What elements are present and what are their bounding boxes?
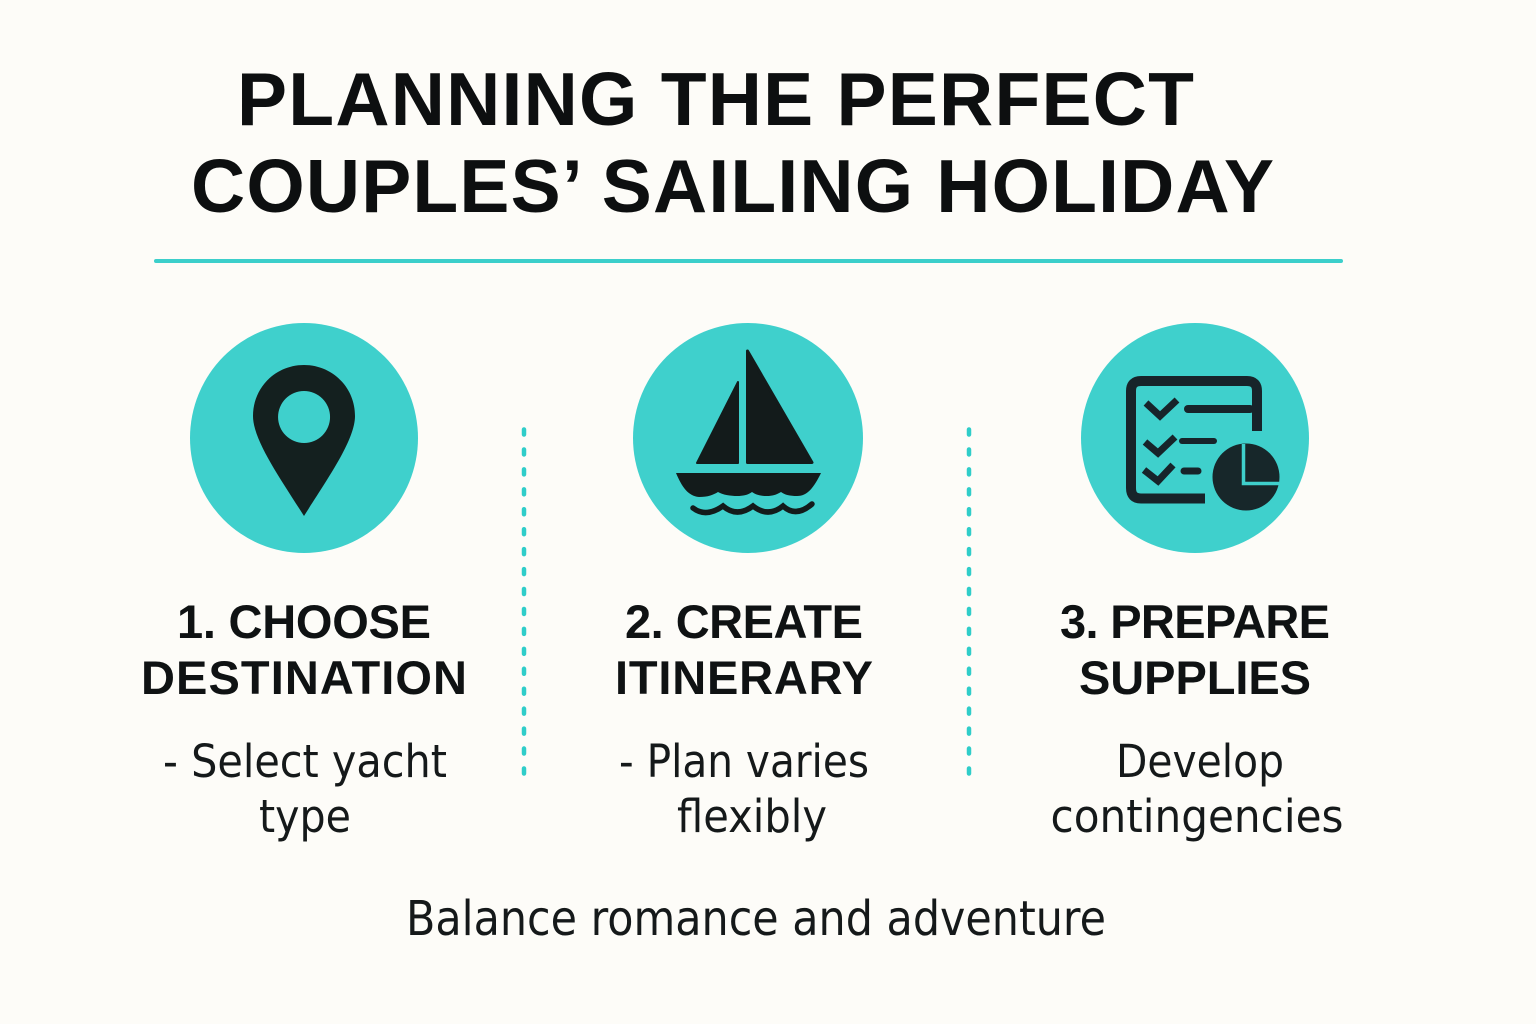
step 1 heading	[141, 595, 467, 704]
step 3 heading: 3. PREPARE	[1060, 595, 1330, 648]
step 3 text: contingencies	[1050, 790, 1344, 843]
step 3 text	[1050, 735, 1344, 843]
step 1 heading: 1. CHOOSE	[177, 595, 431, 648]
closing note: Balance romance and adventure	[406, 891, 1106, 947]
step 2 text	[619, 735, 869, 843]
step 2 text: flexibly	[677, 790, 827, 843]
step 2 heading: 2. CREATE	[625, 595, 863, 648]
step 1 text	[163, 735, 447, 843]
icon: location pin	[190, 323, 418, 553]
title	[191, 57, 1274, 228]
step 1 text: type	[259, 790, 351, 843]
title: PLANNING THE PERFECT	[237, 57, 1194, 141]
step 3 text: Develop	[1116, 735, 1284, 788]
icon: checklist with pie chart	[1081, 323, 1309, 553]
step 2 heading	[615, 595, 873, 704]
step 3 heading	[1060, 595, 1330, 704]
step 1 heading: DESTINATION	[141, 651, 467, 704]
step 2 text: - Plan varies	[619, 735, 869, 788]
step 3 heading: SUPPLIES	[1079, 651, 1311, 704]
title: COUPLES’ SAILING HOLIDAY	[191, 144, 1274, 228]
step 1 text: - Select yacht	[163, 735, 447, 788]
step 2 heading: ITINERARY	[615, 651, 873, 704]
icon: sailboat	[633, 323, 863, 553]
